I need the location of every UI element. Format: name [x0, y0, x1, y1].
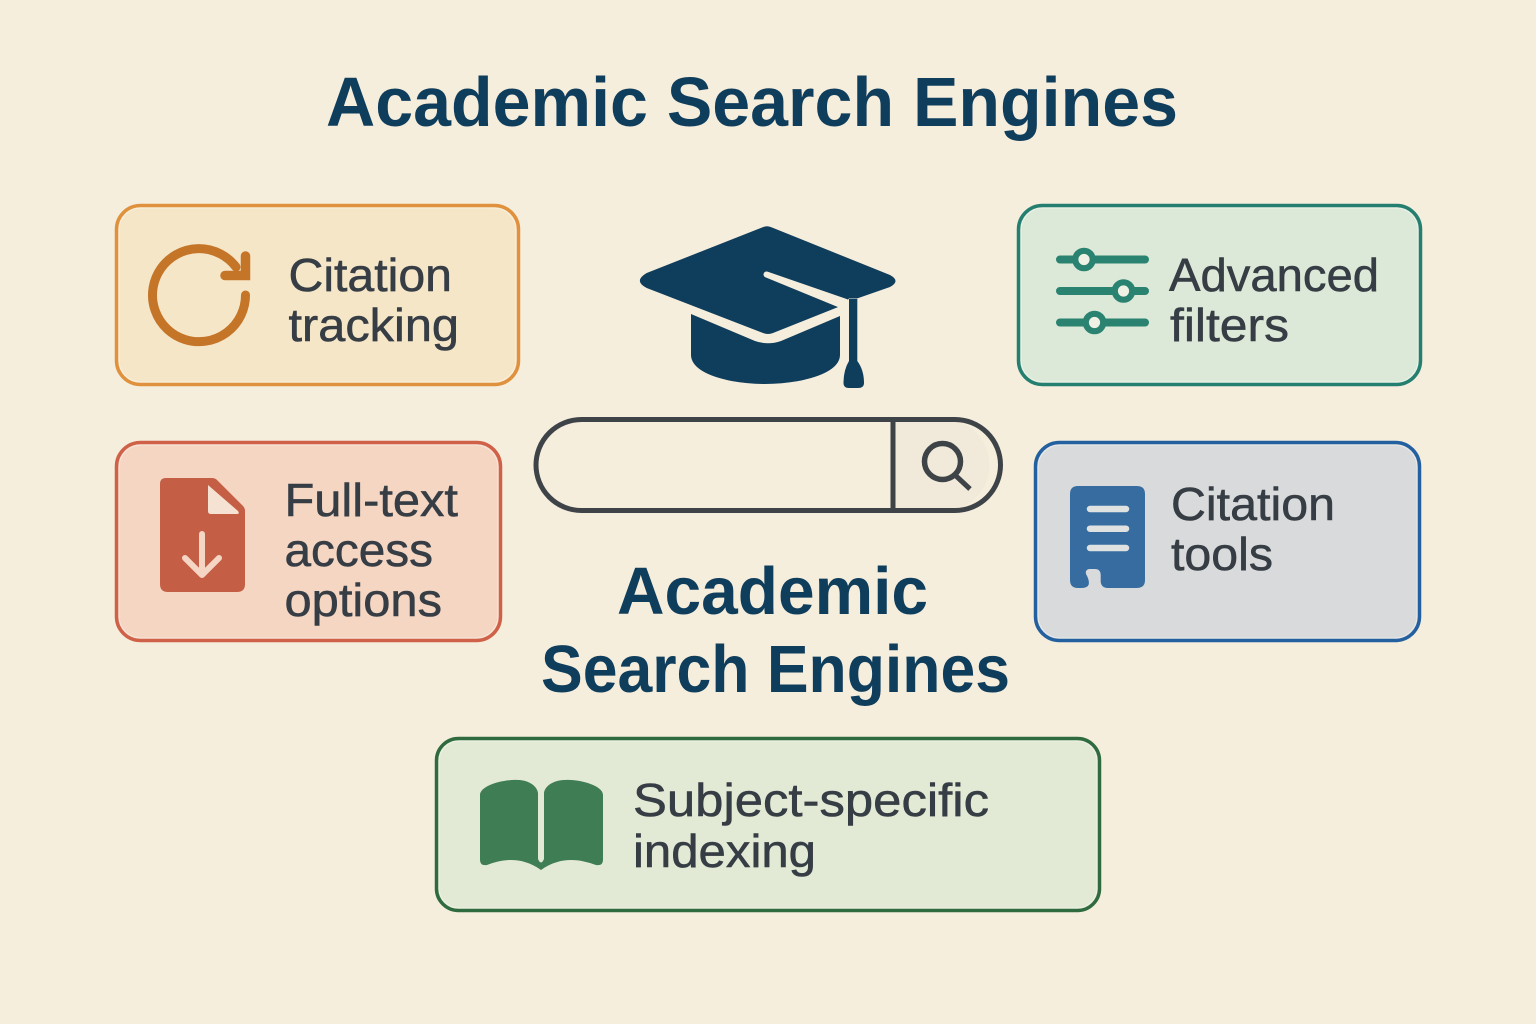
icon: sliders: [1060, 251, 1145, 331]
label: full-text access options: access: [284, 524, 433, 576]
label: subject-specific indexing: Subject-specific: [633, 774, 989, 826]
label: citation tools: tools: [1171, 528, 1273, 580]
icon: graduation cap: [640, 226, 896, 388]
center heading: Academic: [617, 554, 928, 629]
title: Academic Search Engines: [326, 63, 1178, 141]
icon: open book: [480, 780, 603, 870]
label: advanced filters: Advanced: [1169, 249, 1379, 301]
label: citation tracking: tracking: [288, 299, 459, 351]
label: citation tracking: Citation: [288, 249, 452, 301]
icon: document download: [160, 478, 245, 592]
panel: subject-specific indexing: [436, 738, 1100, 910]
label: full-text access options: options: [284, 574, 442, 626]
label: full-text access options: Full-text: [284, 474, 458, 526]
label: subject-specific indexing: indexing: [633, 825, 816, 877]
search bar: [536, 420, 1000, 510]
icon: magnifying glass: [924, 444, 970, 489]
icon: circular arrow: [153, 249, 246, 342]
center heading: Search Engines: [541, 632, 1010, 707]
icon: citation document: [1070, 486, 1145, 588]
panel: full-text access options: [116, 442, 500, 640]
panel: citation tracking: [116, 206, 518, 384]
label: citation tools: Citation: [1171, 478, 1335, 530]
panel: advanced filters: [1018, 206, 1420, 384]
label: advanced filters: filters: [1170, 299, 1289, 351]
panel: citation tools: [1036, 442, 1420, 640]
